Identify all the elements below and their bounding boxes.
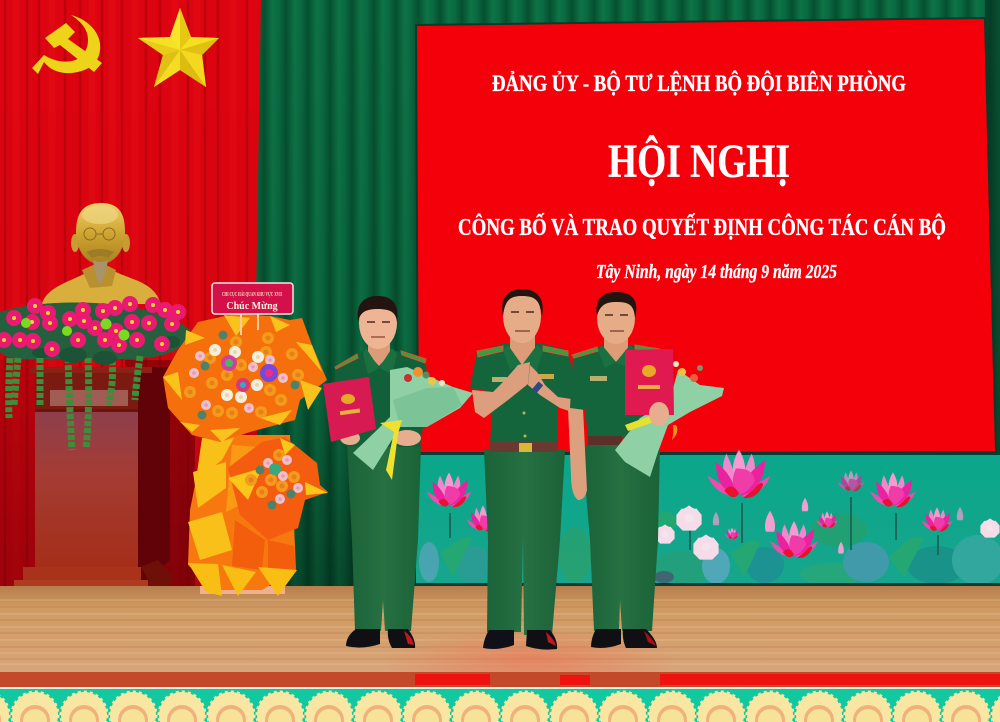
officer: left [323, 296, 473, 648]
bust statue [42, 203, 161, 304]
congratulation sign [212, 283, 293, 314]
shoes [483, 630, 557, 650]
clasped hands and forearms [472, 362, 578, 418]
congratulation sign: CHI CỤC HẢI QUAN KHU VỰC XVII [222, 290, 282, 298]
pink flowers [0, 296, 186, 357]
upper bouquet [163, 314, 327, 442]
screen text block [458, 70, 946, 283]
chest badges [492, 374, 554, 382]
belt [588, 436, 622, 445]
hands [340, 430, 421, 446]
background: red stage curtain [0, 0, 261, 586]
shoes [591, 629, 657, 648]
bouquet [353, 367, 473, 480]
epaulettes [335, 351, 426, 369]
background: green stage curtain [250, 0, 1000, 586]
bouquet [615, 361, 724, 477]
shirt [335, 345, 428, 447]
red document [625, 349, 674, 415]
shoes [346, 629, 415, 648]
congratulation sign: Chúc Mừng [226, 301, 278, 312]
epaulettes [477, 346, 568, 357]
mural stems [450, 497, 938, 555]
buttons [522, 376, 526, 438]
lime buds [21, 318, 130, 340]
red document [323, 377, 376, 442]
shirt [470, 343, 578, 445]
emblem: hammer and sickle [32, 15, 102, 74]
hanging vines [9, 356, 140, 450]
floral garland on podium [0, 296, 190, 450]
arm [568, 408, 587, 500]
lower bouquet [228, 437, 328, 540]
neck and head [502, 289, 543, 370]
sign posts [241, 314, 258, 335]
mural lotus flowers [426, 450, 1000, 560]
emblem: gold star [138, 8, 219, 87]
flower stand [163, 283, 328, 596]
ribbon [380, 420, 402, 480]
red floor strip [0, 672, 1000, 688]
epaulettes [572, 345, 660, 358]
podium [14, 367, 172, 595]
wooden stage floor [0, 586, 1000, 690]
trousers [582, 445, 660, 631]
hand [649, 402, 669, 426]
belt [490, 442, 558, 452]
dark leaves [32, 336, 180, 365]
projection screen: red backdrop [416, 18, 996, 454]
place and date: Tây Ninh, ngày 14 tháng 9 năm 2025 [596, 261, 837, 283]
teal lotus mural panel [416, 450, 1000, 586]
trousers [347, 445, 421, 631]
decorative flower border [0, 687, 1000, 722]
mural leaves [419, 512, 1000, 585]
neck and head [596, 292, 636, 368]
trousers [484, 450, 565, 635]
shirt [570, 345, 662, 438]
organisation heading: ĐẢNG ỦY - BỘ TƯ LỆNH BỘ ĐỘI BIÊN PHÒNG [492, 70, 906, 96]
conference title: HỘI NGHỊ [608, 134, 790, 188]
chest badge [590, 376, 607, 381]
lower ribbon skirt [188, 435, 297, 596]
neck and head [358, 296, 398, 374]
stand easel feet [200, 586, 285, 594]
officer: centre [470, 289, 578, 650]
officer: right [568, 292, 724, 648]
mural base line [416, 583, 1000, 586]
